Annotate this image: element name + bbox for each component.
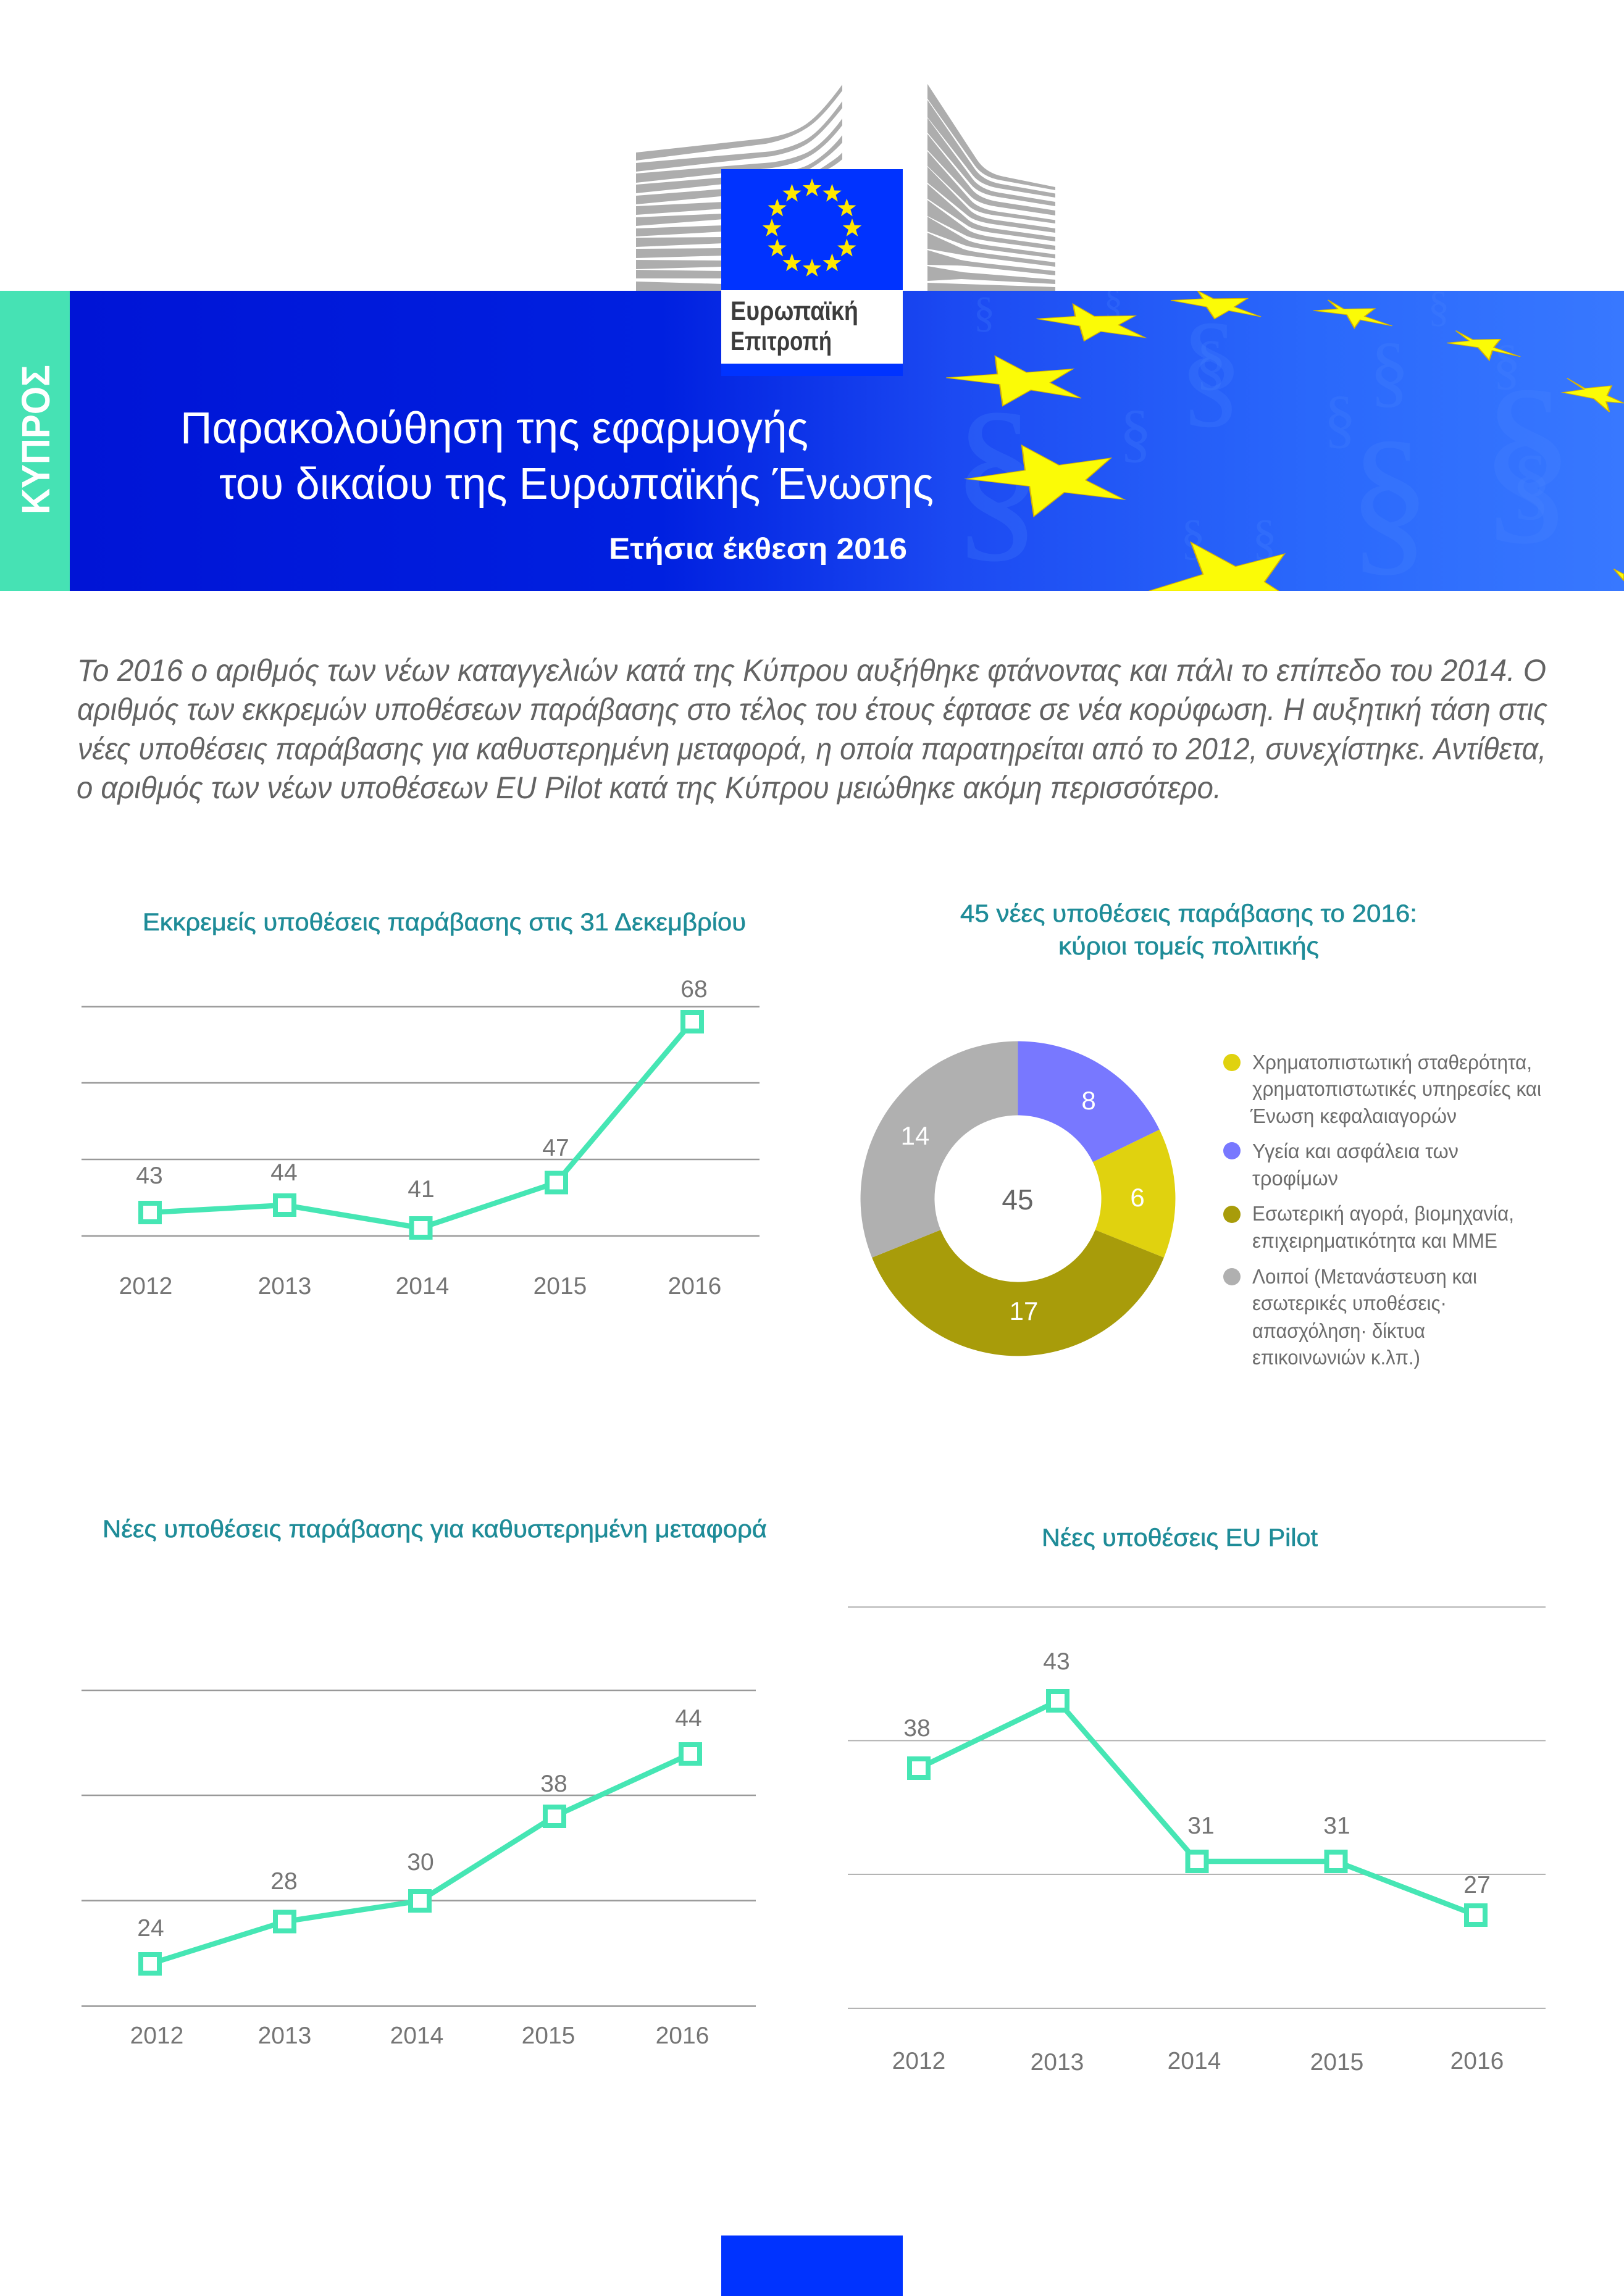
chart heading: κύριοι τομείς πολιτικής xyxy=(1058,933,1319,960)
title: Παρακολούθηση της εφαρμογής xyxy=(180,404,808,453)
legend: χρηματοπιστωτικές υπηρεσίες και xyxy=(1252,1077,1541,1100)
line series with markers xyxy=(141,1745,700,1973)
value labels: 47 xyxy=(542,1135,569,1161)
banner: blue background with stars: § xyxy=(1347,406,1431,591)
panel: pending infringement cases chart xyxy=(82,909,760,1300)
year axis: 2015 xyxy=(522,2023,575,2049)
legend: Υγεία και ασφάλεια των xyxy=(1252,1140,1459,1163)
value labels: 38 xyxy=(540,1771,567,1797)
banner: blue background with stars xyxy=(69,282,1624,591)
banner: blue background with stars: § xyxy=(1178,296,1244,440)
chart heading: Εκκρεμείς υποθέσεις παράβασης στις 31 Δεκεμβρίου xyxy=(143,909,746,936)
country tab xyxy=(0,291,70,591)
legend: επιχειρηματικότητα και ΜΜΕ xyxy=(1252,1229,1497,1252)
legend: Λοιποί (Μετανάστευση και xyxy=(1252,1265,1477,1288)
European Commission logo xyxy=(721,169,903,376)
year axis xyxy=(892,2048,1504,2076)
year axis: 2013 xyxy=(258,1273,311,1300)
year axis: 2012 xyxy=(119,1273,172,1300)
title: του δικαίου της Ευρωπαϊκής Ένωσης xyxy=(219,459,934,509)
value labels: 43 xyxy=(1043,1648,1070,1675)
line series with markers xyxy=(910,1692,1485,1924)
donut chart: 8 xyxy=(1081,1086,1096,1115)
intro paragraph: ο αριθμός των νέων υποθέσεων EU Pilot κατά της Κύπρου μειώθηκε ακόμη περισσότερο. xyxy=(77,770,1221,805)
banner: blue background with stars: § xyxy=(951,374,1044,578)
donut chart xyxy=(861,1041,1175,1356)
chart heading: Νέες υποθέσεις παράβασης για καθυστερημένη μεταφορά xyxy=(103,1516,767,1543)
year axis: 2012 xyxy=(130,2023,183,2049)
year axis: 2015 xyxy=(534,1273,587,1300)
year axis: 2014 xyxy=(1168,2048,1221,2074)
icon: circle of EU stars xyxy=(763,178,861,277)
legend: απασχόληση· δίκτυα xyxy=(1252,1319,1425,1342)
intro paragraph xyxy=(77,653,1548,805)
year axis: 2015 xyxy=(1310,2049,1363,2076)
banner: blue background with stars: § xyxy=(1120,396,1152,469)
year axis xyxy=(130,2023,709,2049)
donut chart: 45 xyxy=(1002,1183,1034,1216)
intro paragraph: Το 2016 ο αριθμός των νέων καταγγελιών κατά της Κύπρου αυξήθηκε φτάνοντας και πάλι το επίπεδο του 2014. Ο xyxy=(77,653,1546,688)
legend: Ένωση κεφαλαιαγορών xyxy=(1250,1104,1457,1127)
legend: Χρηματοπιστωτική σταθερότητα, xyxy=(1252,1051,1532,1074)
year axis: 2016 xyxy=(668,1273,721,1300)
year axis: 2013 xyxy=(1031,2049,1084,2076)
donut chart: 6 xyxy=(1130,1183,1145,1212)
logo wordmark: Ευρωπαϊκή xyxy=(730,296,858,326)
value labels: 24 xyxy=(137,1915,164,1942)
banner: blue background with stars: § xyxy=(1324,382,1356,454)
panel: EU Pilot cases chart xyxy=(848,1524,1546,2076)
value labels xyxy=(136,976,708,1203)
panel: late transposition cases chart xyxy=(82,1516,767,2049)
legend: Εσωτερική αγορά, βιομηχανία, xyxy=(1252,1202,1514,1225)
line series with markers xyxy=(141,1012,701,1237)
chart heading: 45 νέες υποθέσεις παράβασης το 2016: xyxy=(960,900,1417,927)
chart heading: Νέες υποθέσεις EU Pilot xyxy=(1042,1524,1318,1551)
country tab: ΚΥΠΡΟΣ xyxy=(14,365,58,514)
value labels: 41 xyxy=(408,1176,435,1203)
banner: blue background with stars: § xyxy=(1252,511,1277,565)
banner: blue background with stars: § xyxy=(1370,327,1409,415)
intro paragraph: αριθμός των εκκρεμών υποθέσεων παράβασης στο τέλος του έτους έφτασε σε νέα κορύφωση. Η αυξητική τάση στις xyxy=(77,692,1548,727)
banner: blue background with stars: § xyxy=(1428,283,1450,331)
value labels: 43 xyxy=(136,1163,163,1189)
value labels: 44 xyxy=(270,1159,298,1186)
banner: blue background with stars: § xyxy=(1480,350,1575,562)
value labels: 68 xyxy=(680,976,708,1003)
legend xyxy=(1223,1051,1541,1369)
chart heading xyxy=(960,900,1417,960)
banner: blue background with stars: § xyxy=(1493,334,1520,395)
year axis: 2014 xyxy=(390,2023,443,2049)
icon: Berlaymont building, right wing xyxy=(927,84,1055,291)
value labels: 31 xyxy=(1323,1813,1350,1839)
value labels: 28 xyxy=(270,1868,298,1895)
year axis: 2012 xyxy=(892,2048,945,2074)
value labels: 31 xyxy=(1187,1813,1215,1839)
legend: εσωτερικές υποθέσεις· xyxy=(1252,1292,1447,1314)
value labels: 38 xyxy=(903,1715,931,1742)
banner: blue background with stars: § xyxy=(973,289,995,336)
year axis: 2014 xyxy=(396,1273,449,1300)
panel: policy areas donut chart xyxy=(861,900,1541,1369)
value labels xyxy=(903,1648,1491,1898)
year axis: 2013 xyxy=(258,2023,311,2049)
intro paragraph: νέες υποθέσεις παράβασης για καθυστερημένη μεταφορά, η οποία παρατηρείται από το 2012, συνεχίστηκε. Αντίθετα, xyxy=(78,732,1546,766)
value labels: 44 xyxy=(675,1705,702,1732)
year axis xyxy=(119,1273,721,1300)
donut chart: 17 xyxy=(1010,1296,1038,1325)
year axis: 2016 xyxy=(1450,2048,1504,2074)
value labels: 27 xyxy=(1463,1872,1491,1898)
banner: blue background with stars: § xyxy=(1104,282,1123,322)
subtitle: Ετήσια έκθεση 2016 xyxy=(609,533,907,566)
donut chart: 14 xyxy=(901,1121,929,1150)
logo wordmark: Επιτροπή xyxy=(730,327,832,356)
legend: επικοινωνιών κ.λπ.) xyxy=(1252,1346,1420,1369)
footer blue block xyxy=(721,2235,903,2296)
value labels xyxy=(137,1705,702,1942)
banner: blue background with stars: § xyxy=(1195,328,1226,396)
year axis: 2016 xyxy=(656,2023,709,2049)
title xyxy=(180,404,934,509)
banner: blue background with stars: § xyxy=(1512,439,1551,528)
legend: τροφίμων xyxy=(1252,1167,1338,1190)
icon: Berlaymont building, left wing xyxy=(636,85,842,291)
value labels: 30 xyxy=(407,1849,434,1876)
banner: blue background with stars: § xyxy=(1181,511,1205,565)
logo wordmark xyxy=(730,296,858,356)
